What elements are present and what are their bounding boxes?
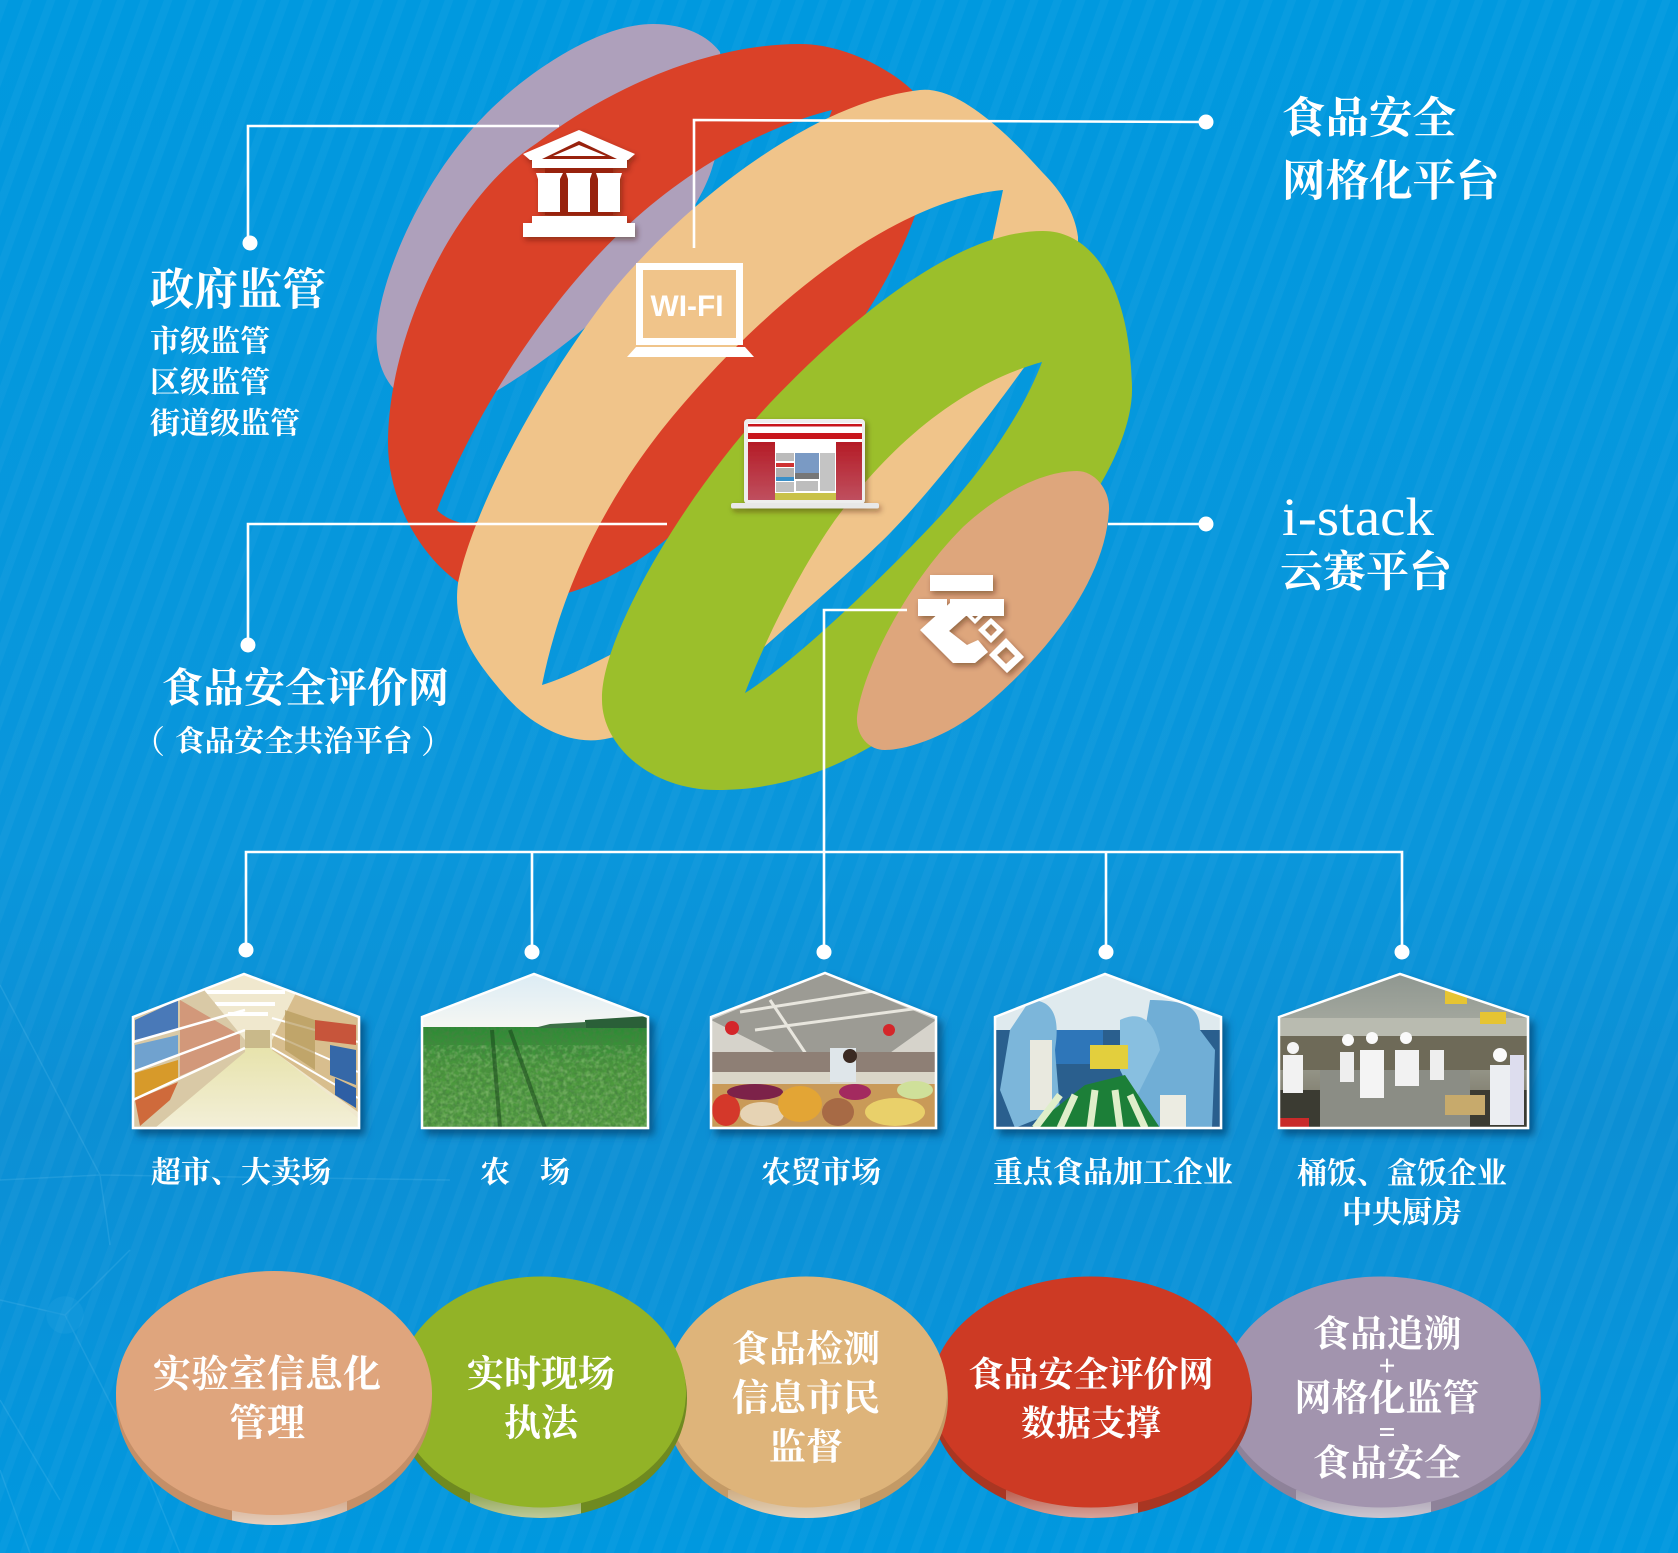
photo captions: 重点食品加工企业 bbox=[993, 1156, 1233, 1190]
ring: green bbox=[602, 231, 1132, 790]
photo: farmers market bbox=[711, 973, 937, 1128]
disc: food testing public oversight: 食品检测 bbox=[732, 1328, 880, 1370]
text: grid platform bbox=[1282, 95, 1501, 206]
photo: central kitchen bbox=[1279, 974, 1528, 1128]
disc: food safety equation: 食品安全 bbox=[1313, 1442, 1461, 1484]
text: government supervision bbox=[150, 266, 326, 440]
ring: lilac ellipse bbox=[377, 24, 723, 406]
disc: evaluation network data support: 数据支撑 bbox=[1021, 1404, 1161, 1444]
photo captions: 超市、大卖场 bbox=[151, 1156, 331, 1190]
photo: supermarket bbox=[133, 974, 359, 1128]
disc: on-site enforcement: 实时现场 bbox=[467, 1354, 615, 1396]
disc: evaluation network data support: 食品安全评价网 bbox=[968, 1356, 1214, 1394]
text: i-stack platform: 云赛平台 bbox=[1280, 548, 1454, 596]
disc: food safety equation: 食品追溯 bbox=[1313, 1314, 1461, 1356]
text: i-stack platform bbox=[1280, 487, 1454, 596]
ring: red bbox=[388, 44, 926, 600]
globe of overlapping rings bbox=[377, 24, 1132, 790]
disc: food testing public oversight: 信息市民 bbox=[732, 1378, 880, 1420]
text: grid platform: 食品安全 bbox=[1282, 95, 1456, 143]
disc: food safety equation: + bbox=[1378, 1350, 1396, 1382]
disc: laboratory informatization: 管理 bbox=[229, 1403, 305, 1445]
disc: on-site enforcement bbox=[395, 1276, 687, 1522]
disc: evaluation network data support bbox=[930, 1276, 1252, 1522]
text: government supervision: 政府监管 bbox=[150, 266, 326, 314]
connector dots bbox=[238, 114, 1410, 960]
disc: food safety equation bbox=[1221, 1276, 1541, 1522]
text: grid platform: 网格化平台 bbox=[1282, 158, 1501, 206]
icon: wi-fi laptop bbox=[627, 266, 754, 357]
photo captions: 中央厨房 bbox=[1342, 1196, 1462, 1230]
connector lines bbox=[246, 120, 1402, 950]
icon: i-stack cloud glyph bbox=[918, 575, 1024, 673]
text: food safety evaluation network bbox=[133, 665, 453, 760]
photo: food processing plant bbox=[995, 974, 1221, 1128]
discs row bbox=[116, 1271, 1541, 1527]
photo: farm field bbox=[422, 974, 648, 1128]
disc: food safety equation: = bbox=[1378, 1416, 1396, 1448]
text: government supervision: 街道级监管 bbox=[150, 408, 300, 440]
text: government supervision: 市级监管 bbox=[150, 326, 270, 358]
photo captions: 农贸市场 bbox=[760, 1156, 881, 1190]
photo captions bbox=[151, 1156, 1507, 1230]
text: i-stack platform: i-stack bbox=[1282, 487, 1434, 547]
text: food safety evaluation network: （ bbox=[133, 724, 165, 760]
icon: website on laptop bbox=[731, 419, 879, 508]
disc: laboratory informatization bbox=[116, 1271, 432, 1527]
ring: peach ellipse bbox=[857, 471, 1109, 750]
text: food safety evaluation network: 食品安全评价网 bbox=[162, 665, 449, 711]
photo captions: 农 场 bbox=[479, 1156, 570, 1190]
icon: government building bbox=[523, 130, 635, 237]
disc: on-site enforcement: 执法 bbox=[504, 1402, 581, 1444]
icon: wi-fi laptop: WI-FI bbox=[650, 290, 724, 323]
disc: laboratory informatization: 实验室信息化 bbox=[153, 1354, 381, 1396]
disc: food safety equation: 网格化监管 bbox=[1294, 1378, 1480, 1420]
text: food safety evaluation network: 食品安全共治平台 bbox=[175, 725, 414, 758]
disc: food testing public oversight: 监督 bbox=[769, 1426, 843, 1468]
text: food safety evaluation network: ） bbox=[421, 724, 453, 760]
photo captions: 桶饭、盒饭企业 bbox=[1297, 1158, 1507, 1190]
text: government supervision: 区级监管 bbox=[150, 366, 270, 400]
disc: food testing public oversight bbox=[664, 1276, 948, 1522]
ring: cream bbox=[457, 90, 1078, 740]
